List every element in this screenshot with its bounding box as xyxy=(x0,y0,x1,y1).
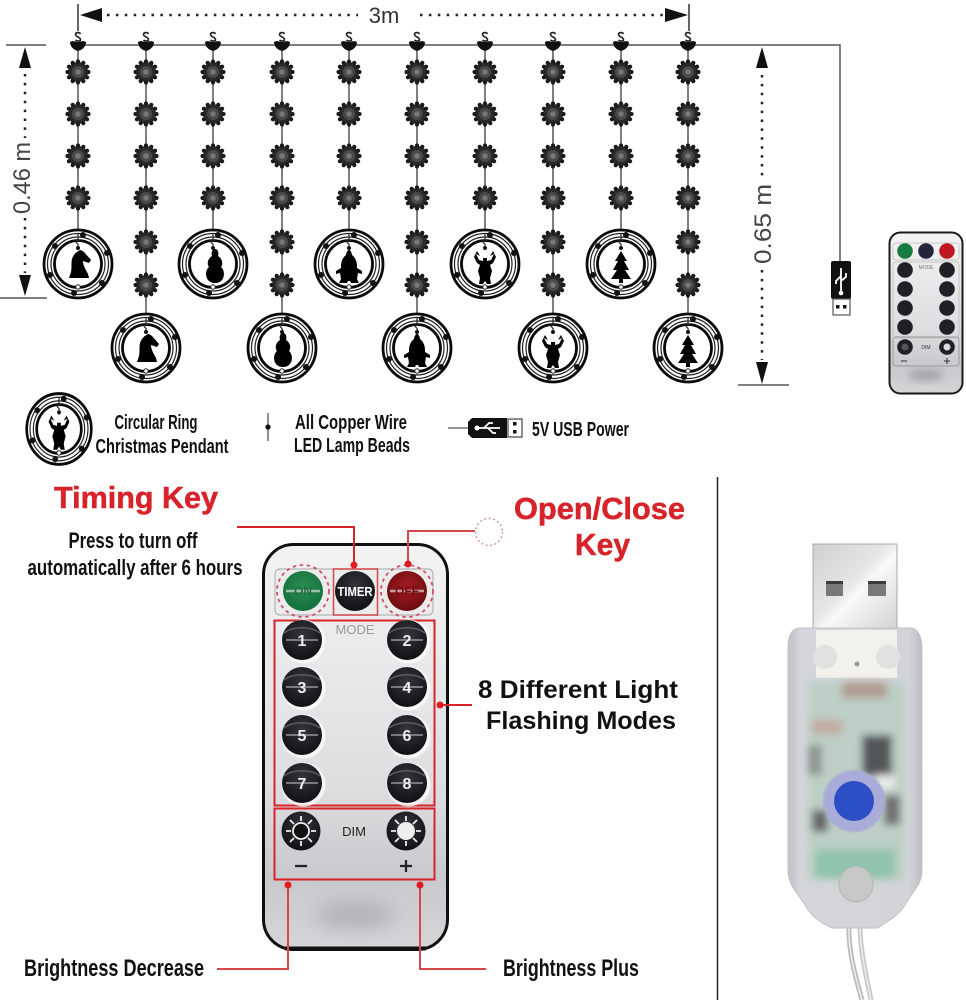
large remote control xyxy=(264,544,448,950)
light strand 6 with santa ring xyxy=(383,33,451,382)
mode button group: 4 xyxy=(403,680,412,697)
mode button group: 6 xyxy=(403,728,412,745)
mode button group: 2 xyxy=(403,633,412,650)
mode button group: 3 xyxy=(298,680,307,697)
small remote control xyxy=(890,232,962,394)
callout line: timing key xyxy=(237,527,358,568)
legend: circular ring pendant xyxy=(27,394,229,464)
label: brightness plus: Brightness Plus xyxy=(503,955,639,982)
text: timing key description: Press to turn off xyxy=(68,528,198,553)
blue button xyxy=(823,770,885,832)
legend: copper wire LED beads: All Copper Wire xyxy=(295,412,407,434)
icon: USB plug on wire xyxy=(831,261,851,315)
label: brightness decrease: Brightness Decrease xyxy=(24,955,204,982)
heading: Open/Close Key xyxy=(514,491,685,562)
legend: copper wire LED beads xyxy=(265,412,410,457)
button: on xyxy=(277,565,329,617)
mode button group: 7 xyxy=(298,776,307,793)
dimension: 0.46 m height: 0.46 m xyxy=(9,142,36,214)
mode button group: MODE xyxy=(336,622,375,637)
metal insert xyxy=(813,630,900,678)
USB metal plug xyxy=(813,544,897,630)
LED bead xyxy=(839,866,873,902)
heading: Timing Key: Timing Key xyxy=(54,480,219,515)
light strand 5 with santa ring xyxy=(315,33,383,298)
text: 8 different light flashing modes: Flashing Modes xyxy=(486,707,676,735)
heading: Open/Close Key: Open/Close xyxy=(514,491,685,526)
light strand 3 with snowman ring xyxy=(179,33,247,298)
light strand 4 with snowman ring xyxy=(248,33,316,382)
callout line: open/close key xyxy=(404,518,502,568)
dimension: 0.65 m height xyxy=(738,47,789,385)
light strand 8 with reindeer ring xyxy=(519,33,587,382)
button: off xyxy=(381,565,433,617)
vertical divider xyxy=(716,477,718,1000)
circuit board xyxy=(808,682,904,880)
callout line: flashing modes xyxy=(436,702,472,708)
light strand 7 with reindeer ring xyxy=(451,33,519,298)
callout line: brightness plus xyxy=(416,882,486,969)
text: timing key description: automatically after 6 hours xyxy=(28,555,242,580)
mode button group: 8 xyxy=(403,776,412,793)
button: off: OFF xyxy=(395,584,419,598)
mode button group xyxy=(274,620,434,806)
mode button group: 5 xyxy=(298,728,307,745)
light strand 10 with tree ring xyxy=(654,33,722,382)
dimension: 3m width xyxy=(78,3,689,31)
button: timer xyxy=(334,569,378,615)
button: on: ON xyxy=(294,584,312,598)
small remote control: MODE xyxy=(918,265,934,271)
text: timing key description xyxy=(28,528,242,580)
light strand 2 with knight ring xyxy=(112,33,180,382)
small remote control: DIM xyxy=(921,345,931,351)
translucent housing xyxy=(788,628,922,928)
legend: copper wire LED beads: LED Lamp Beads xyxy=(294,435,410,457)
callout line: brightness decrease xyxy=(217,882,292,969)
dimension: 0.46 m height xyxy=(0,45,47,298)
dimension: 0.65 m height: 0.65 m xyxy=(750,184,777,264)
top hanging wire xyxy=(78,45,840,262)
button: timer: TIMER xyxy=(338,584,373,599)
cables xyxy=(849,925,871,1000)
text: 8 different light flashing modes: 8 Different Light xyxy=(478,676,679,704)
text: 8 different light flashing modes xyxy=(478,676,679,735)
light strand 1 with knight ring xyxy=(44,33,112,298)
heading: Open/Close Key: Key xyxy=(575,527,631,562)
light strand 9 with tree ring xyxy=(587,33,655,298)
legend: circular ring pendant: Circular Ring xyxy=(114,412,198,434)
legend: USB power xyxy=(448,418,629,441)
legend: circular ring pendant: Christmas Pendant xyxy=(96,436,229,458)
USB controller illustration xyxy=(788,544,922,1000)
mode button group: 1 xyxy=(298,633,307,650)
dim button group xyxy=(274,808,434,880)
dim button group: DIM xyxy=(342,824,366,839)
legend: USB power: 5V USB Power xyxy=(532,419,629,441)
dimension: 3m width: 3m xyxy=(369,3,399,28)
